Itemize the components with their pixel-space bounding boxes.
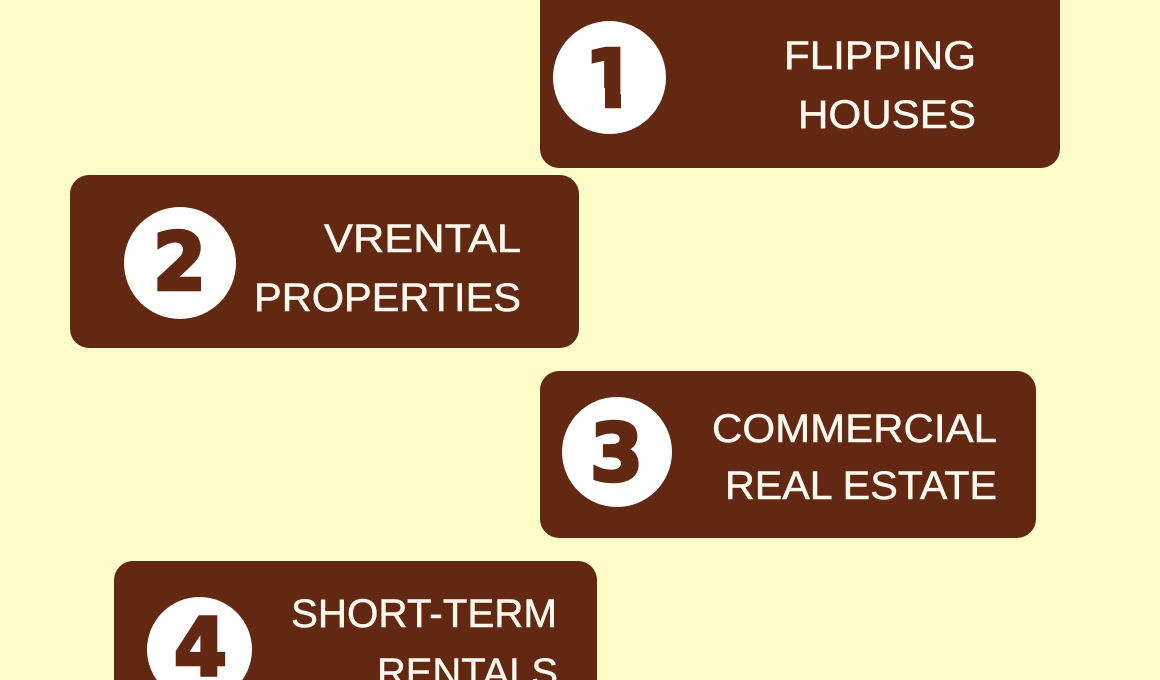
panel: step 2 vrental properties xyxy=(70,175,579,348)
number badge 2: 2 xyxy=(153,216,206,308)
label: commercial real estate: REAL ESTATE xyxy=(725,464,997,508)
label: flipping houses: FLIPPING xyxy=(784,34,976,78)
label: commercial real estate: COMMERCIAL xyxy=(712,407,997,451)
label: vrental properties: PROPERTIES xyxy=(254,276,521,320)
label: short-term rentals: SHORT-TERM xyxy=(291,592,557,636)
number badge 3 xyxy=(562,397,672,507)
number badge 2 xyxy=(124,207,236,319)
panel: step 3 commercial real estate xyxy=(540,371,1036,538)
label: short-term rentals xyxy=(291,592,558,680)
label: vrental properties xyxy=(254,217,521,320)
panel: step 1 flipping houses xyxy=(540,0,1060,168)
label: commercial real estate xyxy=(712,407,997,508)
number badge 4 xyxy=(147,597,252,680)
label: flipping houses: HOUSES xyxy=(798,93,976,137)
panel background 3 xyxy=(540,371,1036,538)
panel: step 4 short-term rentals xyxy=(114,561,597,680)
label: vrental properties: VRENTAL xyxy=(324,217,521,261)
number badge 3: 3 xyxy=(590,408,643,500)
label: flipping houses xyxy=(784,34,976,137)
panel background 4 xyxy=(114,561,597,680)
panel background 2 xyxy=(70,175,579,348)
number badge 1 xyxy=(553,21,666,134)
number badge 1: 1 xyxy=(585,34,636,126)
panel background 1 xyxy=(540,0,1060,168)
